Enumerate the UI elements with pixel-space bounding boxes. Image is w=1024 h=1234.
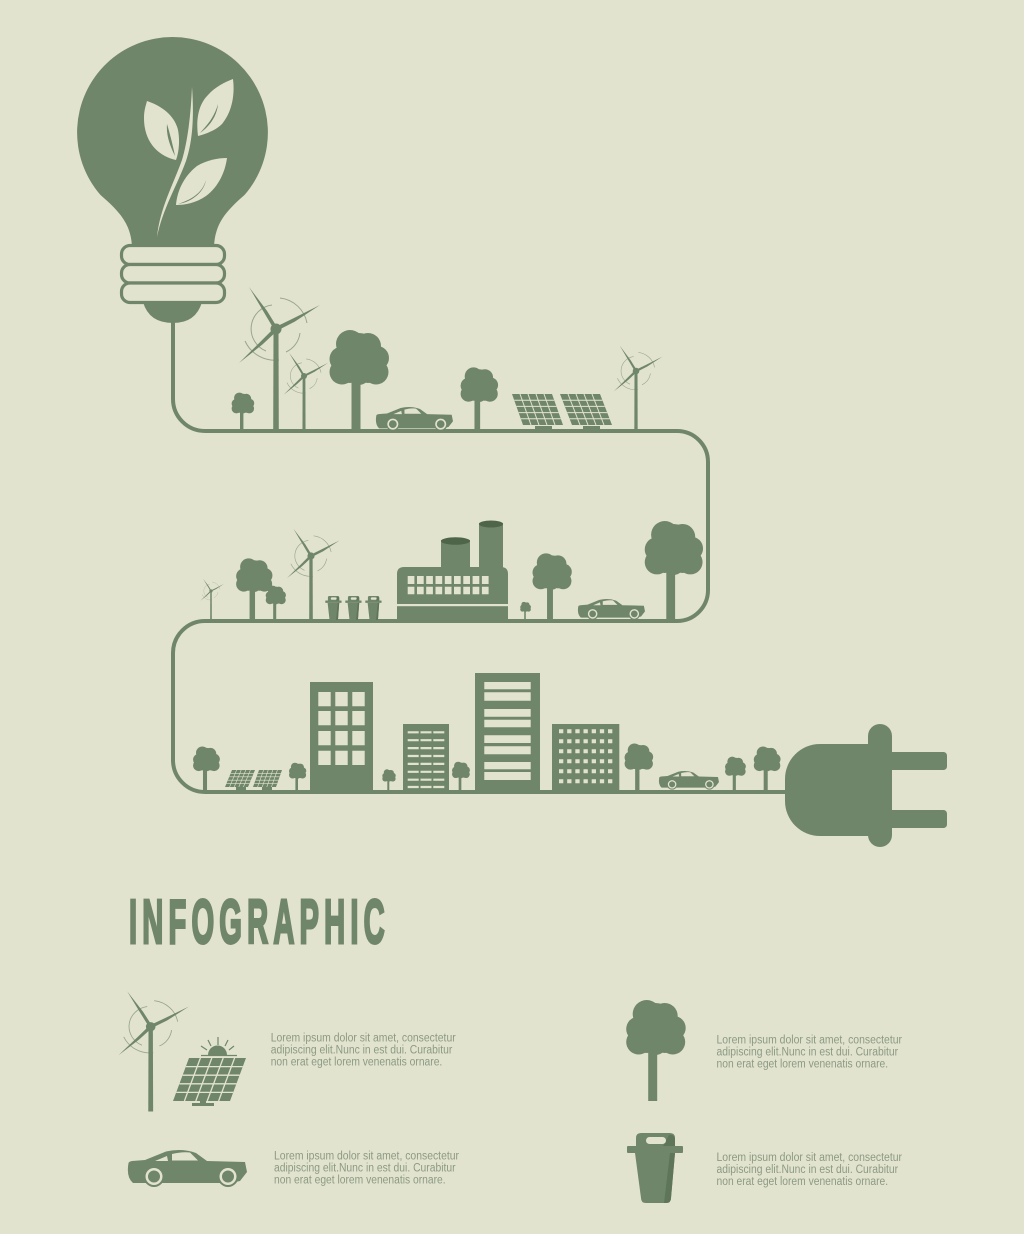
right wind turbine	[614, 346, 662, 432]
row 3: city buildings, trees, panels and car	[193, 673, 781, 792]
legend: tree	[626, 1000, 902, 1101]
tiny tree	[520, 602, 531, 620]
small tree	[289, 763, 306, 792]
solar panel right	[560, 394, 612, 425]
large tree	[330, 330, 389, 431]
icon: car	[128, 1150, 247, 1187]
text block: adipiscing elit.Nunc in est dui. Curabitur	[271, 1044, 452, 1056]
car	[659, 771, 719, 790]
tree	[533, 553, 572, 620]
icon: solar panel with sun	[173, 1037, 246, 1106]
icon: bin	[627, 1133, 683, 1203]
car	[376, 407, 453, 431]
tree	[236, 558, 272, 620]
text block	[716, 1152, 902, 1188]
small tree	[266, 586, 286, 620]
legend: bin	[627, 1133, 902, 1203]
solar panels	[225, 770, 282, 790]
building 3	[475, 673, 540, 792]
legend: car	[128, 1150, 459, 1187]
legend: wind and solar	[119, 991, 456, 1112]
row 1: wind turbines, trees, car and solar panels	[232, 287, 662, 432]
solar panel left	[512, 394, 563, 425]
text block: non erat eget lorem venenatis ornare.	[274, 1174, 446, 1186]
solar panel stands	[535, 426, 600, 431]
icon: tree	[626, 1000, 686, 1101]
building 2	[403, 724, 449, 792]
text block: Lorem ipsum dolor sit amet, consectetur	[274, 1150, 459, 1162]
wind turbine	[287, 529, 340, 622]
medium wind turbine	[284, 353, 328, 432]
text block: non erat eget lorem venenatis ornare.	[271, 1056, 442, 1068]
text block: Lorem ipsum dolor sit amet, consectetur	[716, 1034, 902, 1046]
row 2: turbines, trees, bins, factory and car	[200, 520, 703, 622]
tiny tree	[382, 769, 396, 792]
tree	[754, 747, 781, 792]
tree	[625, 744, 653, 792]
text block: non erat eget lorem venenatis ornare.	[716, 1059, 888, 1071]
small tree	[452, 762, 470, 792]
text block: adipiscing elit.Nunc in est dui. Curabitur	[716, 1164, 898, 1176]
text block: adipiscing elit.Nunc in est dui. Curabitur	[716, 1047, 898, 1059]
text block: adipiscing elit.Nunc in est dui. Curabitur	[274, 1162, 456, 1174]
building 1	[310, 682, 373, 792]
icon: electric plug	[785, 724, 947, 847]
icon: wind turbine	[119, 991, 189, 1112]
small tree	[232, 393, 254, 431]
title: INFOGRAPHIC	[129, 888, 390, 957]
tree	[193, 747, 220, 792]
small tree	[725, 757, 746, 792]
large wind turbine	[239, 287, 320, 430]
recycling bins	[325, 596, 382, 620]
building 4	[552, 724, 619, 792]
text block: Lorem ipsum dolor sit amet, consectetur	[271, 1032, 456, 1044]
tiny wind turbine	[200, 579, 224, 620]
factory	[397, 520, 508, 620]
text block	[271, 1032, 456, 1068]
text block: Lorem ipsum dolor sit amet, consectetur	[716, 1152, 902, 1164]
tree	[461, 367, 498, 431]
text block: non erat eget lorem venenatis ornare.	[716, 1176, 888, 1188]
car	[578, 599, 645, 620]
large tree	[645, 521, 703, 620]
text block	[716, 1034, 902, 1071]
icon: light bulb with leaves	[77, 37, 268, 323]
cable: road line from bulb to plug	[173, 315, 795, 792]
text block	[274, 1150, 459, 1186]
